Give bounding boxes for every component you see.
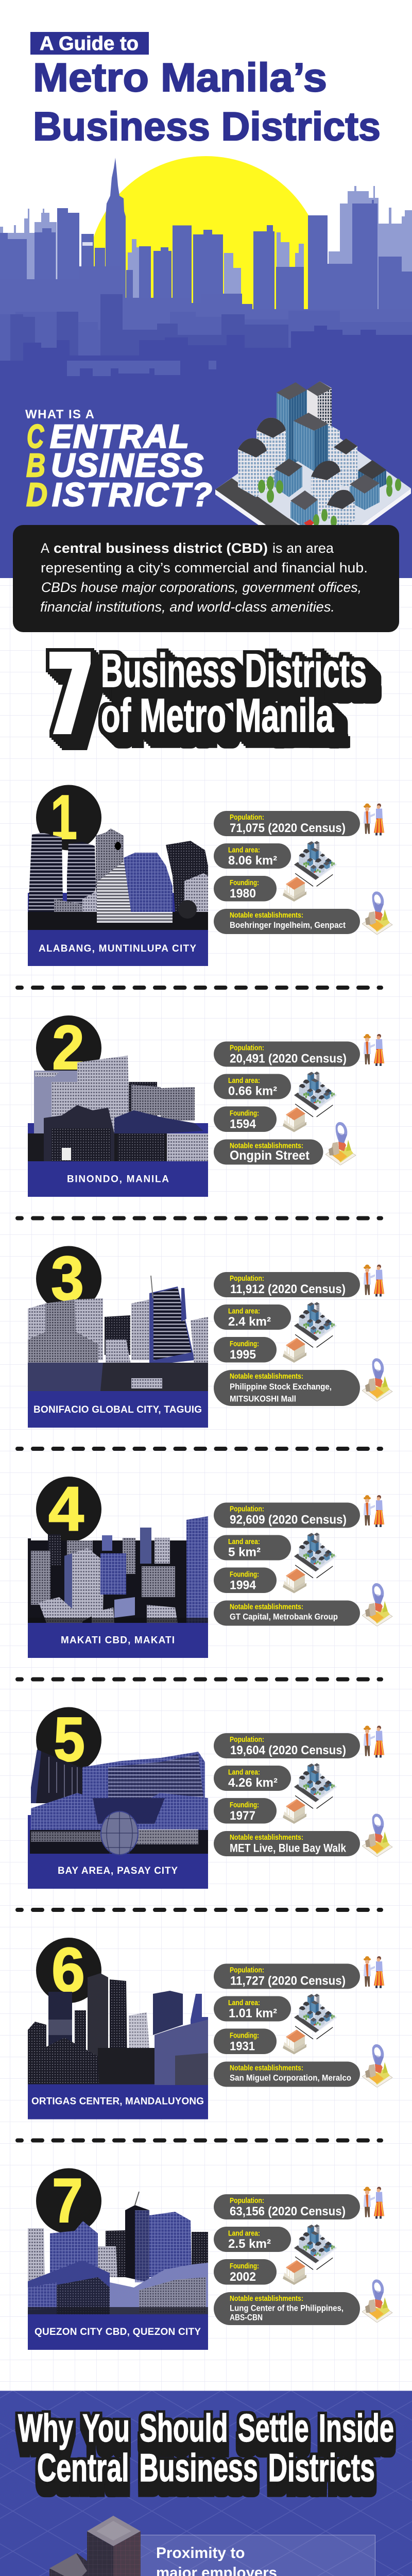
- founding pill: [214, 1337, 277, 1362]
- land area pill: Land area:: [228, 1768, 260, 1776]
- notable pill: [214, 1600, 360, 1626]
- population pill: Population:: [230, 2197, 264, 2205]
- land area pill: 2.4 km²: [228, 1315, 271, 1329]
- number badge 3: 3: [51, 1243, 84, 1313]
- mid skyline mass: [0, 266, 412, 361]
- population pill: 11,912 (2020 Census): [230, 1282, 346, 1296]
- subtitle tag: A Guide to: [40, 33, 139, 55]
- icon: map pin: [362, 891, 392, 935]
- icon: people: [364, 1726, 384, 1758]
- notable pill: [214, 1831, 360, 1856]
- facts 2: [214, 1042, 360, 1164]
- what is a CBD heading: [25, 408, 212, 513]
- icon: people: [364, 1034, 384, 1066]
- founding pill: 1980: [230, 887, 256, 901]
- notable pill: [214, 1140, 323, 1164]
- number badge 1: [36, 782, 101, 852]
- caption panel 5: BAY AREA, PASAY CITY: [58, 1866, 178, 1876]
- district 3: [28, 1243, 392, 1428]
- icon: founding temple: [283, 1799, 306, 1824]
- notable pill: Boehringer Ingelheim, Genpact: [230, 920, 346, 930]
- what is a CBD heading: C: [27, 418, 44, 455]
- population pill: 63,156 (2020 Census): [230, 2205, 346, 2218]
- icon: founding temple: [283, 2260, 306, 2285]
- section background under skyline: [0, 325, 412, 578]
- icon: founding temple: [283, 1108, 306, 1132]
- number badge 2: 2: [52, 1012, 84, 1082]
- population pill: 11,727 (2020 Census): [230, 1974, 346, 1988]
- icon: map pin: [362, 1583, 392, 1626]
- icon: land area city: [294, 1302, 337, 1347]
- land area pill: Land area:: [228, 1538, 260, 1546]
- founding pill: [214, 2029, 277, 2054]
- facts 1: [214, 811, 360, 934]
- why section background: [0, 2391, 412, 2576]
- main title: Metro Manila’s: [33, 55, 327, 100]
- definition box: representing a city’s commercial and financial hub.: [41, 560, 368, 575]
- district 5: [28, 1704, 392, 1889]
- skyline photo 7: [28, 2192, 208, 2314]
- district 6: [28, 1935, 392, 2120]
- caption panel 5: [28, 1815, 208, 1889]
- what is a CBD heading: ISTRICT?: [52, 476, 212, 513]
- main title: [33, 55, 381, 149]
- skyline hero: [0, 156, 412, 578]
- icon: land area city: [294, 1994, 337, 2039]
- what is a CBD heading: D: [26, 476, 47, 513]
- notable pill: Notable establishments:: [230, 1372, 303, 1381]
- caption panel 1: [28, 893, 208, 966]
- population pill: 71,075 (2020 Census): [230, 821, 346, 835]
- caption panel 1: ALABANG, MUNTINLUPA CITY: [39, 943, 196, 954]
- facts 6: [214, 1964, 360, 2087]
- founding pill: Founding:: [230, 1801, 259, 1809]
- notable pill: Lung Center of the Philippines,: [230, 2303, 344, 2313]
- land area pill: [214, 2227, 291, 2252]
- land area pill: Land area:: [228, 2230, 260, 2238]
- land area pill: Land area:: [228, 1999, 260, 2007]
- icon: people: [364, 1956, 384, 1988]
- icon: map pin: [362, 2044, 392, 2088]
- district 1: [28, 782, 392, 966]
- number badge 5: 5: [54, 1704, 85, 1774]
- land area pill: [214, 1996, 291, 2022]
- sun: [94, 156, 308, 309]
- facts 3: [214, 1272, 360, 1406]
- illustration: office towers: [0, 2516, 225, 2576]
- founding pill: 1995: [230, 1348, 256, 1362]
- icon: map pin: [362, 1358, 392, 1401]
- land area pill: [214, 1535, 291, 1560]
- notable pill: Notable establishments:: [230, 1834, 303, 1842]
- founding pill: 1931: [230, 2039, 255, 2054]
- founding pill: [214, 1107, 277, 1132]
- notable pill: MET Live, Blue Bay Walk: [230, 1841, 347, 1855]
- grid background: [0, 578, 412, 2391]
- darkest skyline foreground: [23, 326, 412, 361]
- icon: land area city: [294, 841, 337, 886]
- land area pill: Land area:: [228, 846, 260, 854]
- icon: people: [364, 804, 384, 836]
- founding pill: [214, 1567, 277, 1593]
- founding pill: [214, 2259, 277, 2284]
- number badge 6: 6: [52, 1935, 85, 2005]
- what is a CBD heading: B: [26, 447, 45, 484]
- founding pill: Founding:: [230, 1340, 259, 1348]
- definition box: financial institutions, and world-class amenities.: [40, 599, 335, 615]
- icon: map pin: [325, 1122, 356, 1165]
- skyline photo 6: [28, 1973, 208, 2085]
- founding pill: [214, 876, 277, 902]
- separator 4: [18, 1677, 381, 1682]
- header: [30, 32, 381, 149]
- definition box: A: [41, 540, 49, 556]
- card: proximity to major employers: [93, 2535, 375, 2576]
- population pill: [214, 2194, 360, 2219]
- caption panel 2: BINONDO, MANILA: [67, 1174, 169, 1185]
- caption panel 6: ORTIGAS CENTER, MANDALUYONG: [31, 2096, 204, 2107]
- notable pill: Notable establishments:: [230, 2064, 303, 2072]
- population pill: [214, 1272, 360, 1297]
- front skyline silhouettes: [10, 294, 288, 361]
- founding pill: Founding:: [230, 1570, 259, 1579]
- land area pill: 5 km²: [228, 1546, 261, 1559]
- number badge 2: [36, 1012, 101, 1082]
- land area pill: 2.5 km²: [228, 2237, 271, 2251]
- seven business districts heading: [49, 645, 367, 742]
- separator 3: [18, 1447, 381, 1451]
- icon: founding temple: [283, 877, 306, 902]
- notable pill: [214, 1370, 360, 1406]
- stripes on low building: [82, 242, 93, 246]
- population pill: 92,609 (2020 Census): [230, 1513, 347, 1527]
- icon: land area city: [294, 2224, 337, 2269]
- population pill: Population:: [230, 1736, 264, 1744]
- why settle heading: [18, 2406, 394, 2490]
- notable pill: GT Capital, Metrobank Group: [230, 1612, 338, 1622]
- founding pill: Founding:: [230, 879, 259, 887]
- icon: people: [364, 2187, 384, 2218]
- land area pill: Land area:: [228, 1077, 260, 1085]
- number badge 3: [36, 1243, 101, 1313]
- what is a CBD heading: WHAT IS A: [25, 408, 94, 421]
- population pill: Population:: [230, 1505, 264, 1514]
- what is a CBD heading: ENTRAL: [50, 418, 189, 455]
- caption panel 3: [28, 1391, 208, 1428]
- population pill: 19,604 (2020 Census): [230, 1743, 346, 1757]
- caption panel 2: [28, 1123, 208, 1197]
- population pill: [214, 1502, 360, 1528]
- icon: map pin: [362, 2279, 392, 2323]
- notable pill: San Miguel Corporation, Meralco: [230, 2073, 351, 2082]
- district 7: [28, 2165, 392, 2350]
- notable pill: [214, 2292, 360, 2325]
- founding pill: 1594: [230, 1117, 256, 1131]
- founding pill: Founding:: [230, 1110, 259, 1118]
- land area pill: 4.26 km²: [228, 1776, 278, 1790]
- number badge 7: [36, 2165, 101, 2235]
- icon: land area city: [294, 1072, 337, 1117]
- land area pill: [214, 1074, 291, 1099]
- skyline photo 4: [28, 1516, 208, 1623]
- definition box: [13, 525, 399, 632]
- caption panel 7: QUEZON CITY CBD, QUEZON CITY: [35, 2327, 201, 2337]
- number badge 6: [36, 1935, 101, 2005]
- number badge 5: [36, 1704, 101, 1774]
- icon: land area city: [294, 1763, 337, 1808]
- number badge 4: 4: [48, 1473, 84, 1544]
- definition box: central business district (CBD): [54, 540, 268, 556]
- founding pill: Founding:: [230, 2262, 259, 2270]
- district 2: [28, 1012, 384, 1197]
- separator 2: [18, 1216, 381, 1220]
- notable pill: ABS-CBN: [230, 2312, 263, 2323]
- isometric city illustration: [215, 381, 411, 564]
- notable pill: Philippine Stock Exchange,: [230, 1382, 332, 1392]
- main title: Business Districts: [33, 104, 381, 149]
- land area pill: 0.66 km²: [228, 1084, 277, 1098]
- population pill: [214, 811, 360, 836]
- notable pill: Notable establishments:: [230, 2295, 303, 2303]
- land area pill: Land area:: [228, 1308, 260, 1316]
- notable pill: Ongpin Street: [230, 1148, 310, 1163]
- notable pill: MITSUKOSHI Mall: [230, 1394, 296, 1403]
- skyline photo 1: [28, 828, 208, 930]
- land area pill: 8.06 km²: [228, 854, 277, 868]
- icon: founding temple: [283, 1338, 306, 1363]
- facts 5: [214, 1733, 360, 1856]
- land area pill: [214, 1766, 291, 1791]
- population pill: 20,491 (2020 Census): [230, 1052, 347, 1065]
- land area pill: 1.01 km²: [229, 2006, 277, 2021]
- separator 1: [18, 986, 381, 990]
- skyline photo 5: [30, 1750, 208, 1855]
- front skyline buildings: [0, 158, 412, 340]
- what is a CBD heading: USINESS: [51, 447, 203, 484]
- land area pill: [214, 843, 291, 869]
- caption panel 6: [28, 2084, 208, 2120]
- definition box: is an area: [272, 540, 334, 556]
- population pill: [214, 1733, 360, 1758]
- facts 4: [214, 1502, 360, 1626]
- founding pill: 2002: [230, 2270, 256, 2284]
- caption panel 3: BONIFACIO GLOBAL CITY, TAGUIG: [33, 1404, 202, 1415]
- caption panel 4: MAKATI CBD, MAKATI: [61, 1635, 175, 1646]
- land area pill: [214, 1304, 291, 1330]
- notable pill: Notable establishments:: [230, 1603, 303, 1612]
- caption panel 7: [28, 2314, 208, 2350]
- population pill: Population:: [230, 1275, 264, 1283]
- founding pill: [214, 1798, 277, 1824]
- notable pill: [214, 909, 360, 934]
- district 4: [28, 1473, 392, 1658]
- number badge 7: 7: [52, 2165, 83, 2235]
- population pill: Population:: [230, 1966, 264, 1974]
- skyline photo 3: [28, 1276, 208, 1391]
- icon: map pin: [362, 1814, 392, 1857]
- population pill: [214, 1964, 360, 1989]
- back skyline layer: [0, 186, 412, 361]
- population pill: Population:: [230, 1044, 264, 1052]
- icon: founding temple: [283, 1568, 306, 1593]
- notable pill: Notable establishments:: [230, 911, 303, 920]
- icon: land area city: [294, 1533, 337, 1578]
- population pill: Population:: [230, 814, 264, 822]
- lower skyline mass: [0, 311, 412, 376]
- definition box: CBDs house major corporations, government offices,: [41, 580, 362, 595]
- founding pill: 1977: [230, 1809, 255, 1823]
- facts 7: [214, 2194, 360, 2325]
- founding pill: Founding:: [230, 2032, 259, 2040]
- icon: people: [364, 1495, 384, 1527]
- number badge 1: 1: [50, 782, 77, 852]
- population pill: [214, 1042, 360, 1066]
- notable pill: Notable establishments:: [230, 1142, 303, 1150]
- separator 6: [18, 2138, 381, 2142]
- separator 5: [18, 1908, 381, 1912]
- icon: founding temple: [283, 2030, 306, 2055]
- skyline photo 2: [28, 1056, 208, 1161]
- number badge 4: [36, 1473, 101, 1544]
- icon: people: [364, 1264, 384, 1296]
- notable pill: [214, 2062, 360, 2087]
- caption panel 4: [28, 1623, 208, 1658]
- card: proximity to major employers: Proximity to: [156, 2545, 245, 2562]
- founding pill: 1994: [230, 1579, 256, 1592]
